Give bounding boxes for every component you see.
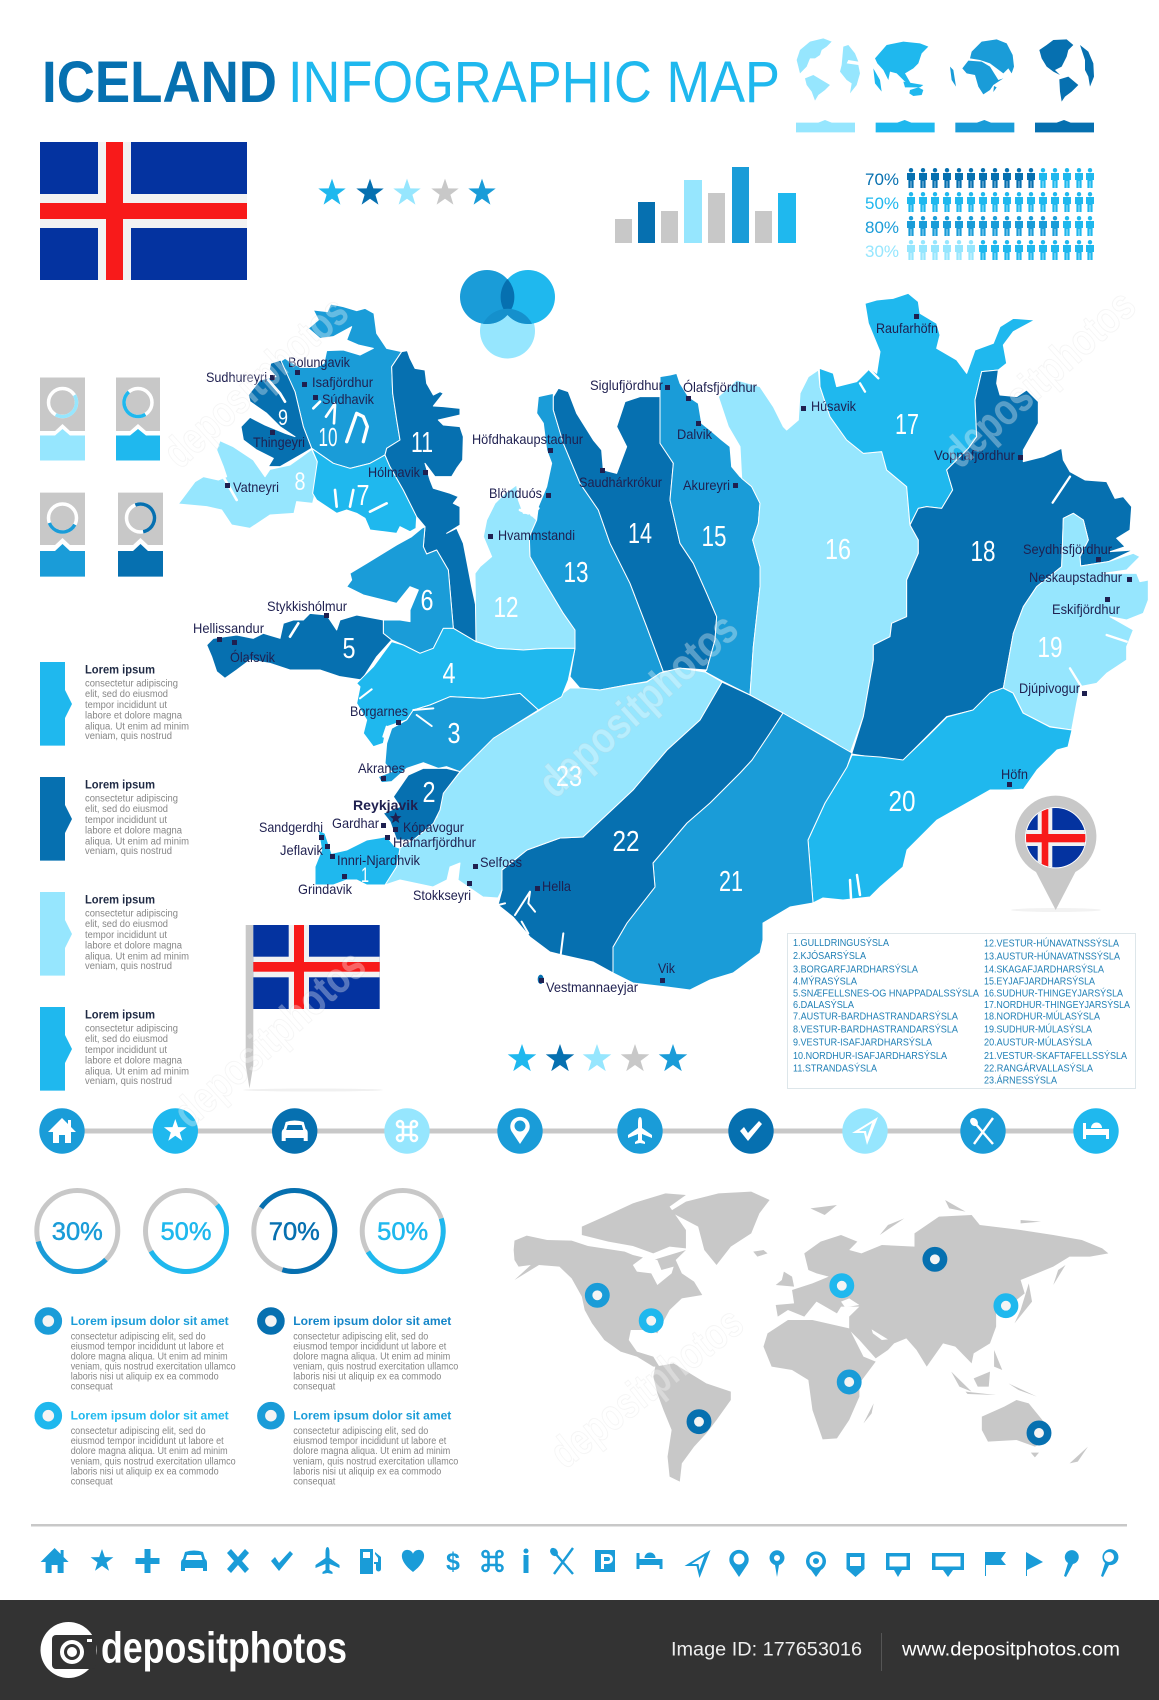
tab 4 [40,1007,189,1091]
people row 1 [907,168,1094,188]
text block 3: dolore magna aliqua. Ut enim ad minim [71,1446,228,1457]
region 11 [385,351,476,642]
icon: star [153,1108,198,1154]
region 6 [347,527,453,653]
Persian Gulf [872,1329,888,1340]
legend column 1: 6.DALASÝSLA [793,998,854,1011]
legend column 2: 23.ÁRNESSÝSLA [984,1073,1057,1086]
east fjords [860,370,1127,690]
side text tabs [40,662,189,1091]
town labels [193,320,1122,995]
region numbers: 19 [1038,632,1062,664]
south-east coast details [850,790,1022,898]
town labels: Húsavik [811,398,857,414]
flag of Iceland [40,142,247,280]
region numbers: 17 [895,409,919,441]
region 7 [312,448,417,533]
tab 2: Lorem ipsum [85,777,155,791]
British Isles [776,1272,794,1287]
tab 3: tempor incididunt ut [85,930,167,941]
legend column 1: 9.VESTUR-ISAFJARDHARSÝSLA [793,1036,932,1049]
tab 1 [40,662,189,746]
legend column 2: 22.RANGÁRVALLASÝSLA [984,1062,1093,1075]
legend column 2: 19.SUDHUR-MÚLASÝSLA [984,1023,1092,1036]
text block 1: eiusmod tempor incididunt ut labore et [71,1341,224,1352]
flag on pole [243,925,383,1092]
region numbers: 11 [411,427,433,459]
region numbers: 4 [442,658,456,690]
icon: plane [617,1108,663,1154]
town labels: Stykkishólmur [267,598,347,614]
title: INFOGRAPHIC MAP [288,50,780,115]
text block 1: Lorem ipsum dolor sit amet [71,1316,229,1328]
town labels: Höfn [1001,766,1028,782]
text block 3: Lorem ipsum dolor sit amet [71,1411,229,1423]
tab 1: labore et dolore magna [85,711,182,722]
region numbers: 9 [278,405,288,430]
region 22 [498,682,783,973]
region 10 [280,304,402,468]
watermarks: depositphotos [154,287,358,477]
ring 50%: 50% [160,1218,212,1246]
tab 4: labore et dolore magna [85,1056,182,1067]
divider [31,1524,1127,1526]
percent labels [865,170,899,261]
tab 2: elit, sed do eiusmod [85,804,168,815]
town labels: Hólmavik [368,464,421,480]
tab 3: Lorem ipsum [85,892,155,906]
legend column 1: 2.KJÓSARSÝSLA [793,949,866,962]
bottom icon row [41,1546,1118,1578]
region 20 [808,688,1072,903]
globe 4 [1039,39,1094,102]
people row 2 [907,192,1094,212]
region numbers: 10 [318,422,338,452]
text block 4: Lorem ipsum dolor sit amet [293,1411,451,1423]
town labels: Grindavik [298,881,353,897]
text block 1: dolore magna aliqua. Ut enim ad minim [71,1351,228,1362]
tab 4: veniam, quis nostrud [85,1076,172,1087]
website: www.depositphotos.com [901,1639,1120,1661]
globe 1 [797,38,860,101]
legend column 1: 3.BORGARFJARDHARSÝSLA [793,962,918,975]
icon: pin [497,1108,543,1154]
pin block light [40,378,85,460]
text block 4: veniam, quis nostrud exercitation ullamco [293,1456,459,1467]
text block 2: laboris nisi ut aliquip ex ea commodo [293,1372,442,1383]
town labels: Gardhar [332,815,379,831]
logo camera icon [40,1622,96,1678]
region 9 [241,360,312,467]
legend box [788,934,1136,1088]
text block 3: veniam, quis nostrud exercitation ullamco [71,1456,236,1467]
South America [653,1363,731,1482]
tab 3: consectetur adipiscing [85,909,178,920]
town labels: Höfdhakaupstadhur [472,431,583,447]
title [42,50,780,115]
west fjords [223,380,538,637]
Arctic islands [582,1193,686,1253]
town labels: Dalvik [677,426,713,442]
Japan and Kamchatka [945,1200,1066,1323]
text block 1: laboris nisi ut aliquip ex ea commodo [71,1372,219,1383]
percent labels: 70% [865,170,899,189]
image id: Image ID: 177653016 [671,1639,862,1661]
New Zealand and Tasmania [1031,1447,1088,1463]
ring 30%: 30% [52,1218,103,1246]
icon: command [384,1108,430,1154]
Iceland small [753,1250,768,1257]
ring 50% second: 50% [377,1218,428,1246]
town labels: Vik [658,960,676,976]
people percentage chart [865,168,1094,261]
town labels: Sudhureyri [206,369,267,385]
tab 3: elit, sed do eiusmod [85,919,168,930]
people row 4 [907,240,1094,260]
logo wordmark: depositphotos [101,1624,347,1673]
icon: bed [1073,1108,1119,1154]
watermarks [154,280,1145,1478]
text block 2: consequat [293,1382,335,1393]
text block 3: consequat [71,1476,113,1487]
tab 4: consectetur adipiscing [85,1024,178,1035]
text block 3: laboris nisi ut aliquip ex ea commodo [71,1466,219,1477]
town labels: Akranes [358,760,405,776]
Arctic Russia [810,1205,904,1235]
region 13 [529,393,663,690]
tab 1: tempor incididunt ut [85,700,167,711]
town labels: Siglufjördhur [590,377,663,393]
town labels: Vestmannaeyjar [546,979,638,995]
legend column 2: 20.AUSTUR-MÚLASÝSLA [984,1036,1092,1049]
town labels: Ólafsvik [230,649,276,665]
legend column 2: 14.SKAGAFJARDHARSÝSLA [984,962,1104,975]
circle icon row [39,1108,1119,1154]
region 14 [553,388,717,672]
region numbers: 14 [628,518,652,550]
legend column 1: 10.NORDHUR-ISAFJARDHARSÝSLA [793,1049,947,1062]
globe base 3 [955,120,1014,132]
region 18 [852,370,1133,760]
lorem text blocks [38,1311,459,1487]
text block 2: eiusmod tempor incididunt ut labore et [293,1341,446,1352]
tab 3: labore et dolore magna [85,941,182,952]
town labels: Neskaupstadhur [1029,569,1122,585]
Eurasia [776,1215,1108,1367]
footer bar [0,1600,1159,1700]
legend column 1: 5.SNÆFELLSNES-OG HNAPPADALSSÝSLA [793,987,979,1000]
location rings [589,1251,1048,1442]
region numbers: 6 [420,585,434,617]
globe 3 [950,39,1014,94]
town labels: Ólafsfjördhur [683,379,757,395]
region 23 [385,668,722,898]
region numbers: 20 [888,786,916,818]
text block 2: consectetur adipiscing elit, sed do [293,1331,429,1342]
region numbers: 13 [564,557,588,589]
tab 1: Lorem ipsum [85,662,155,676]
tab 2: aliqua. Ut enim ad minim [85,836,189,848]
town labels: Seydhisfjördhur [1023,541,1112,557]
legend column 1: 4.MÝRASÝSLA [793,974,857,987]
tab 3 [40,892,189,976]
tab 1: consectetur adipiscing [85,679,178,690]
town labels: Eskifjördhur [1052,601,1120,617]
icon: car [272,1108,317,1154]
star rating top [318,179,496,205]
world map [514,1192,1108,1482]
text block 1: consequat [71,1382,113,1393]
ring 50% second [352,1180,454,1282]
Greenland [670,1192,770,1265]
tab 4: aliqua. Ut enim ad minim [85,1066,189,1078]
watermarks: depositphotos [541,1298,752,1478]
region numbers: 3 [448,718,460,750]
watermarks: depositphotos [529,604,747,807]
town labels: Isafjördhur [312,374,373,390]
tab 2: consectetur adipiscing [85,794,178,805]
region 8 [178,441,317,528]
town markers [217,314,1132,983]
text block 4: consequat [293,1476,335,1487]
map of Iceland [178,293,1148,995]
pin block mid [40,493,85,577]
bar chart [615,167,796,243]
text block 4: dolore magna aliqua. Ut enim ad minim [293,1446,450,1457]
percent labels: 30% [865,242,899,261]
icon: check [728,1108,774,1154]
town labels: Súdhavik [322,391,375,407]
legend column 2 [984,937,1130,1086]
Hudson Bay [633,1257,674,1285]
region 4 [357,628,575,747]
northern and eastern regions [660,293,1148,760]
percent labels: 80% [865,218,899,237]
region 21 [613,713,852,990]
town labels: Thingeyri [253,434,305,450]
percentage rings [20,1174,454,1288]
region 16 [718,370,918,753]
legend column 2: 13.AUSTUR-HÚNAVATNSSÝSLA [984,949,1120,962]
pin icon blocks [40,378,163,577]
region 2 [383,768,460,840]
town labels: Djúpivogur [1019,680,1080,696]
icon: send [842,1108,888,1154]
town labels: Akureyri [683,477,730,493]
pin block dark [118,493,163,577]
town labels: Saudhárkrókur [579,474,662,490]
legend column 2: 21.VESTUR-SKAFTAFELLSSÝSLA [984,1049,1127,1062]
region 19 [1003,513,1148,730]
legend column 2: 18.NORDHUR-MÚLASÝSLA [984,1010,1100,1023]
Madagascar [863,1403,874,1423]
tab 2 [40,777,189,861]
bottom icon row: $ [446,1548,460,1576]
globe 2 [873,42,928,96]
tab 1: aliqua. Ut enim ad minim [85,722,189,732]
icon: cutlery [960,1108,1006,1154]
tab 4: Lorem ipsum [85,1007,155,1021]
town labels: Jeflavik [280,842,324,858]
town labels: Sandgerdhi [259,819,323,835]
town labels: Hafnarfjördhur [393,834,476,850]
globe base 2 [876,120,935,132]
text block 4: eiusmod tempor incididunt ut labore et [293,1436,446,1447]
legend column 1 [793,936,979,1075]
globes [796,38,1094,132]
text block 1: veniam, quis nostrud exercitation ullamco [71,1362,236,1373]
ring 50% [129,1174,243,1288]
legend column 2: 15.EYJAFJARDHARSÝSLA [984,974,1095,987]
region numbers: 5 [342,633,356,665]
town labels: Selfoss [480,854,522,870]
ring 70% [238,1175,351,1287]
town labels: Stokkseyri [413,887,471,903]
legend column 2: 17.NORDHUR-THINGEYJARSÝSLA [984,998,1130,1011]
map pin with flag [1011,796,1101,912]
region numbers: 18 [970,536,996,568]
town labels: Kópavogur [403,819,464,835]
ring 30% [20,1174,135,1288]
south fjords [360,689,563,955]
text block 3: eiusmod tempor incididunt ut labore et [71,1436,224,1447]
tab 1: elit, sed do eiusmod [85,689,168,700]
text block 2: veniam, quis nostrud exercitation ullamco [293,1362,459,1373]
percent labels: 50% [865,194,899,213]
Black Sea [841,1298,859,1307]
region numbers: 7 [356,480,370,512]
town labels: Innri-Njardhvik [337,852,421,868]
legend column 2: 12.VESTUR-HÚNAVATNSSÝSLA [984,937,1119,950]
Asian islands [951,1350,1037,1397]
region numbers: 12 [494,592,518,624]
region 3 [378,693,538,783]
town labels: Raufarhöfn [876,320,938,336]
western regions [178,304,717,690]
text block 2 [261,1311,459,1393]
legend column 1: 8.VESTUR-BARDHASTRANDARSÝSLA [793,1023,958,1036]
region numbers: 23 [556,761,582,793]
region 12 [475,485,575,650]
tab 3: aliqua. Ut enim ad minim [85,952,189,962]
region numbers: 2 [422,777,436,809]
text block 3: consectetur adipiscing elit, sed do [71,1426,206,1437]
venn diagram [460,270,555,358]
text block 4 [261,1406,459,1487]
globe base 4 [1035,120,1094,132]
town labels: Bolungavik [288,354,351,370]
people row 3 [907,216,1094,236]
legend column 2: 16.SUDHUR-THINGEYJARSÝSLA [984,987,1123,1000]
region 1 [315,830,400,885]
text block 2: dolore magna aliqua. Ut enim ad minim [293,1351,450,1362]
town labels: Vatneyri [233,479,279,495]
pin block bright [116,378,160,460]
text block 1 [38,1311,236,1393]
tab 2: labore et dolore magna [85,826,182,837]
text block 4: consectetur adipiscing elit, sed do [293,1426,429,1437]
region numbers: 15 [702,521,726,553]
region numbers: 1 [361,864,369,887]
region numbers: 21 [719,866,743,898]
globe base 1 [796,120,855,132]
region 5 [207,613,392,680]
region numbers: 16 [825,534,851,566]
town labels: Hellissandur [193,620,264,636]
Australia [982,1400,1049,1447]
town labels: Blönduós [489,485,542,501]
text block 1: consectetur adipiscing elit, sed do [71,1331,206,1342]
town labels: Hvammstandi [498,527,575,543]
tab 2: tempor incididunt ut [85,815,167,826]
North America [514,1236,702,1367]
star rating bottom [508,1044,687,1071]
tab 2: veniam, quis nostrud [85,846,172,857]
town labels: Hella [542,878,571,894]
tab 4: tempor incididunt ut [85,1045,167,1056]
region 17 [819,293,1035,525]
text block 2: Lorem ipsum dolor sit amet [293,1316,451,1328]
legend column 1: 1.GULLDRINGUSÝSLA [793,936,889,949]
tab 3: veniam, quis nostrud [85,961,172,972]
town labels: Reykjavik [353,797,418,813]
legend column 1: 11.STRANDASÝSLA [793,1062,877,1075]
text block 3 [38,1406,236,1487]
Africa [763,1320,876,1439]
watermarks: depositphotos [164,940,375,1137]
region numbers: 8 [294,468,306,496]
town labels: Borgarnes [350,703,408,719]
ring 70%: 70% [269,1218,320,1246]
legend column 1: 7.AUSTUR-BARDHASTRANDARSÝSLA [793,1010,958,1023]
text block 4: laboris nisi ut aliquip ex ea commodo [293,1466,442,1477]
icon: home [39,1108,85,1154]
title: ICELAND [42,50,277,115]
tab 4: elit, sed do eiusmod [85,1034,168,1045]
region numbers: 22 [612,826,640,858]
Vestmannaeyjar island [538,975,544,984]
region numbers [278,405,1062,898]
region 15 [660,373,760,695]
town labels: Vopnafjördhur [934,447,1015,463]
tab 1: veniam, quis nostrud [85,731,172,742]
